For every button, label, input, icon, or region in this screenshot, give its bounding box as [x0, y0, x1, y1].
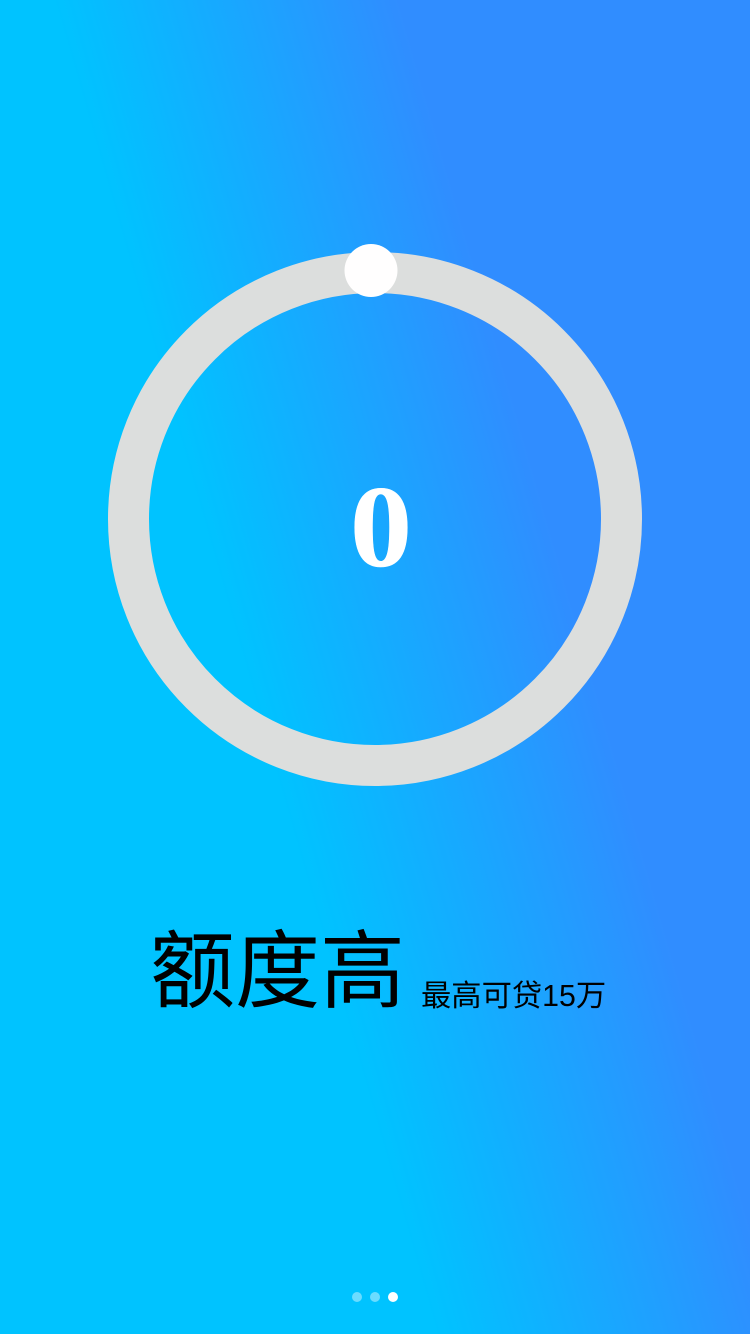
counter number: 0	[350, 463, 412, 592]
subheading: 最高可贷15万	[421, 980, 606, 1013]
heading: 额度高	[150, 925, 405, 1020]
page indicator dots	[352, 1292, 398, 1302]
ring handle	[344, 244, 398, 297]
